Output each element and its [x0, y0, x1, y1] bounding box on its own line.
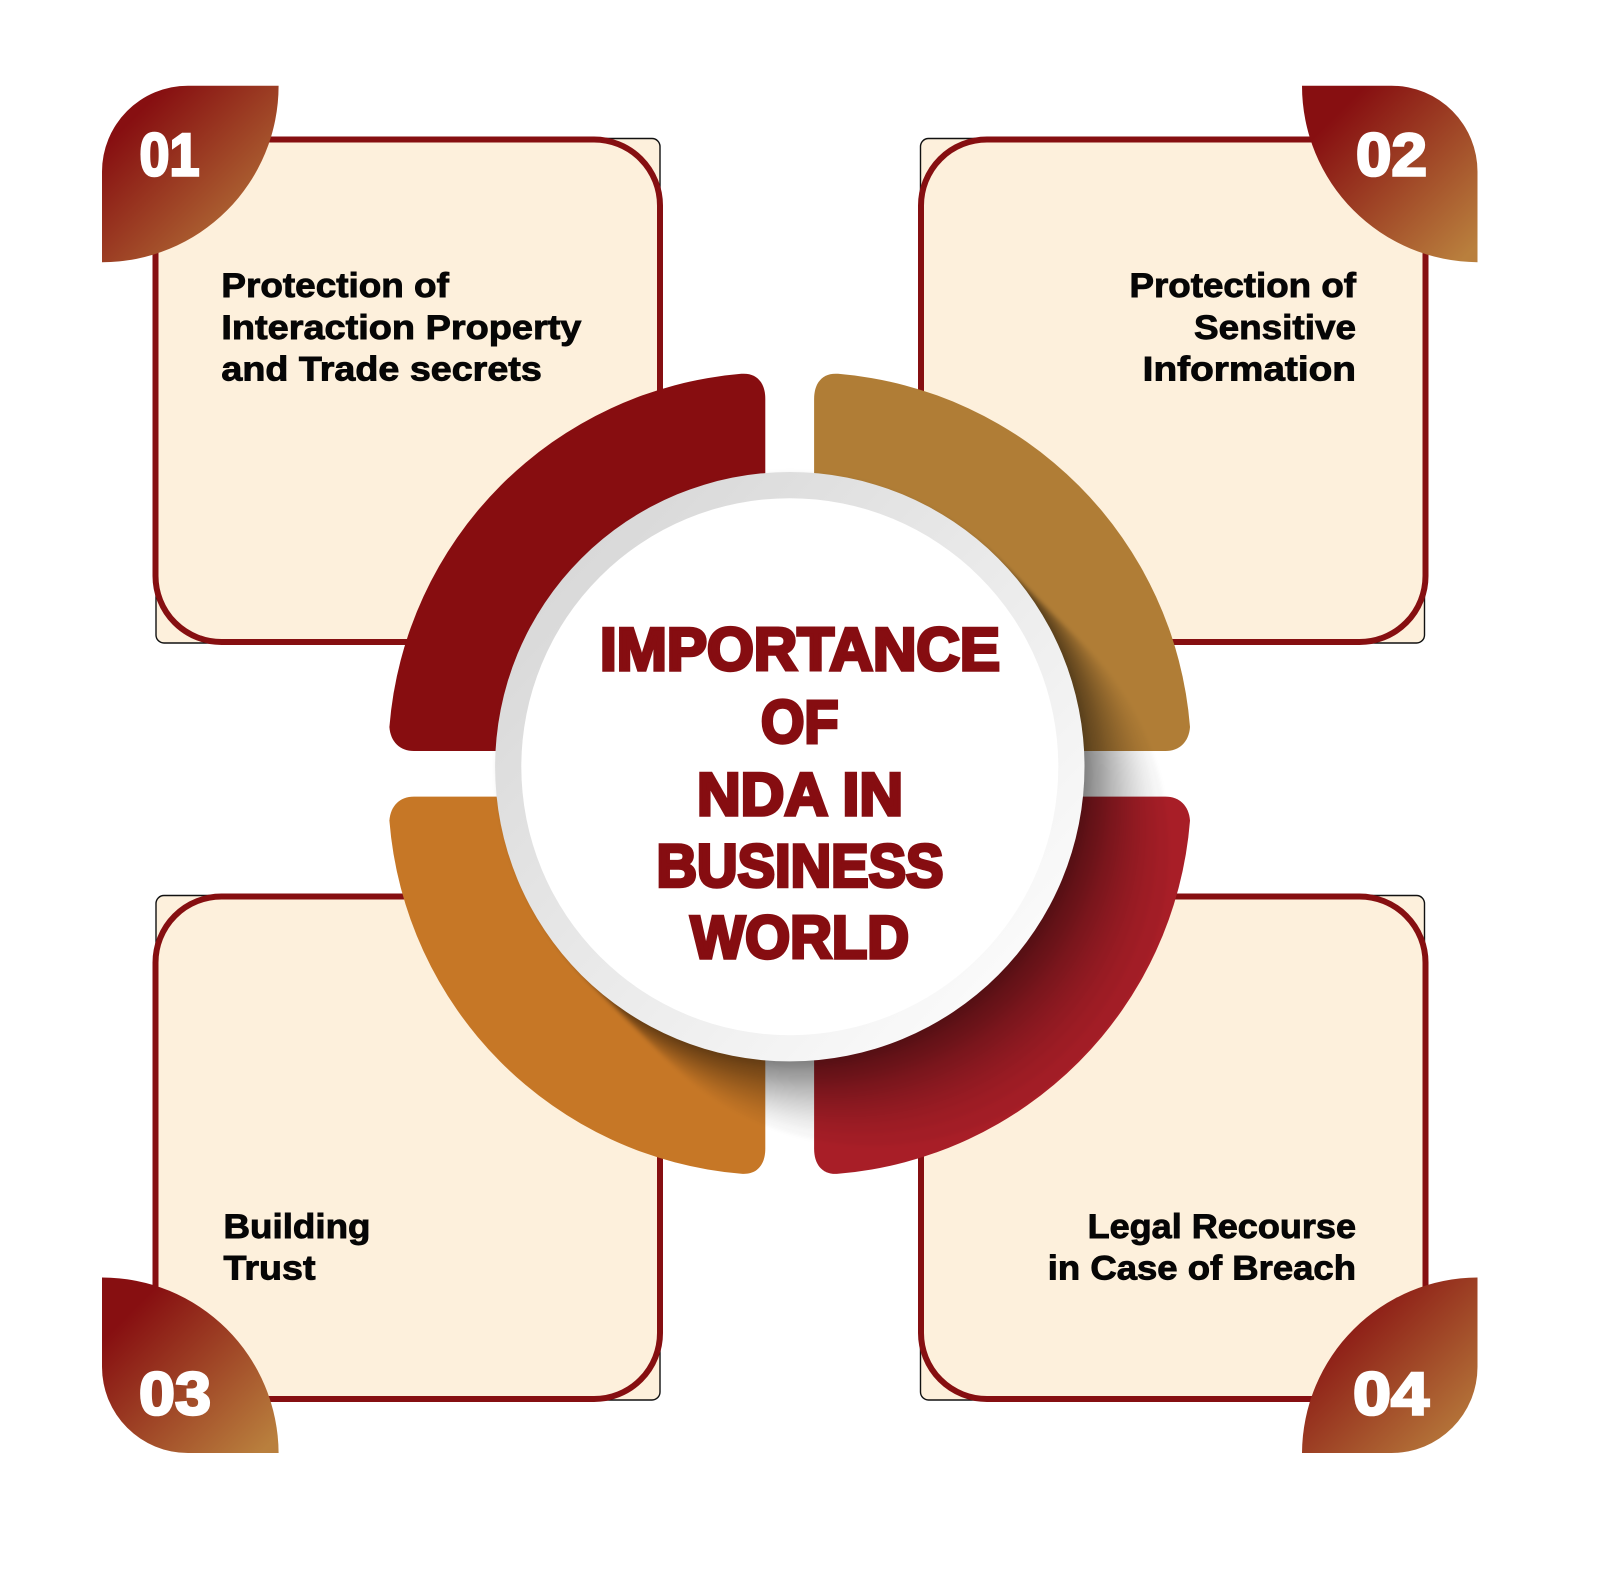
ring segment: top right: [814, 374, 1190, 751]
badge 01: 01: [140, 122, 200, 188]
text: card 03 label: [224, 1208, 370, 1288]
text: card 04 label: in Case of Breach: [1048, 1250, 1356, 1288]
text: card 04 label: Legal Recourse: [1088, 1208, 1356, 1246]
infographic canvas: [102, 86, 1478, 1453]
badge 02: [1302, 86, 1478, 262]
title: [600, 616, 1000, 971]
text: card 03 label: Trust: [224, 1250, 316, 1288]
central circle: [495, 472, 1084, 1061]
text: card 04 label: [1048, 1208, 1356, 1288]
text: card 01 label: [221, 267, 581, 389]
panel: card 04: [920, 896, 1426, 1400]
title: OF: [761, 688, 838, 756]
badge 03: 03: [139, 1360, 211, 1427]
circle drop shadow: [542, 529, 1160, 1136]
badge 03: [102, 1278, 279, 1453]
panel: card 01: [156, 138, 660, 643]
title: WORLD: [690, 904, 909, 971]
badge 01: [102, 86, 279, 262]
title: NDA IN: [697, 761, 903, 828]
text: card 02 label: Protection of: [1130, 267, 1357, 305]
ring segment: bottom right: [814, 797, 1190, 1174]
badge 04: 04: [1353, 1360, 1430, 1427]
badge 04: [1302, 1278, 1478, 1453]
text: card 02 label: [1130, 267, 1357, 389]
text: card 01 label: and Trade secrets: [221, 351, 542, 389]
badge 02: 02: [1356, 122, 1427, 188]
text: card 02 label: Sensitive: [1194, 309, 1356, 347]
title: IMPORTANCE: [600, 616, 1000, 683]
panel: card 03: [156, 896, 660, 1400]
ring segment: top left: [389, 374, 765, 751]
text: card 01 label: Interaction Property: [221, 309, 581, 347]
text: card 01 label: Protection of: [221, 267, 450, 305]
panel: card 02: [920, 138, 1426, 643]
text: card 02 label: Information: [1143, 351, 1356, 389]
title: BUSINESS: [656, 832, 944, 900]
ring segment: bottom left: [389, 797, 765, 1174]
text: card 03 label: Building: [224, 1208, 370, 1246]
